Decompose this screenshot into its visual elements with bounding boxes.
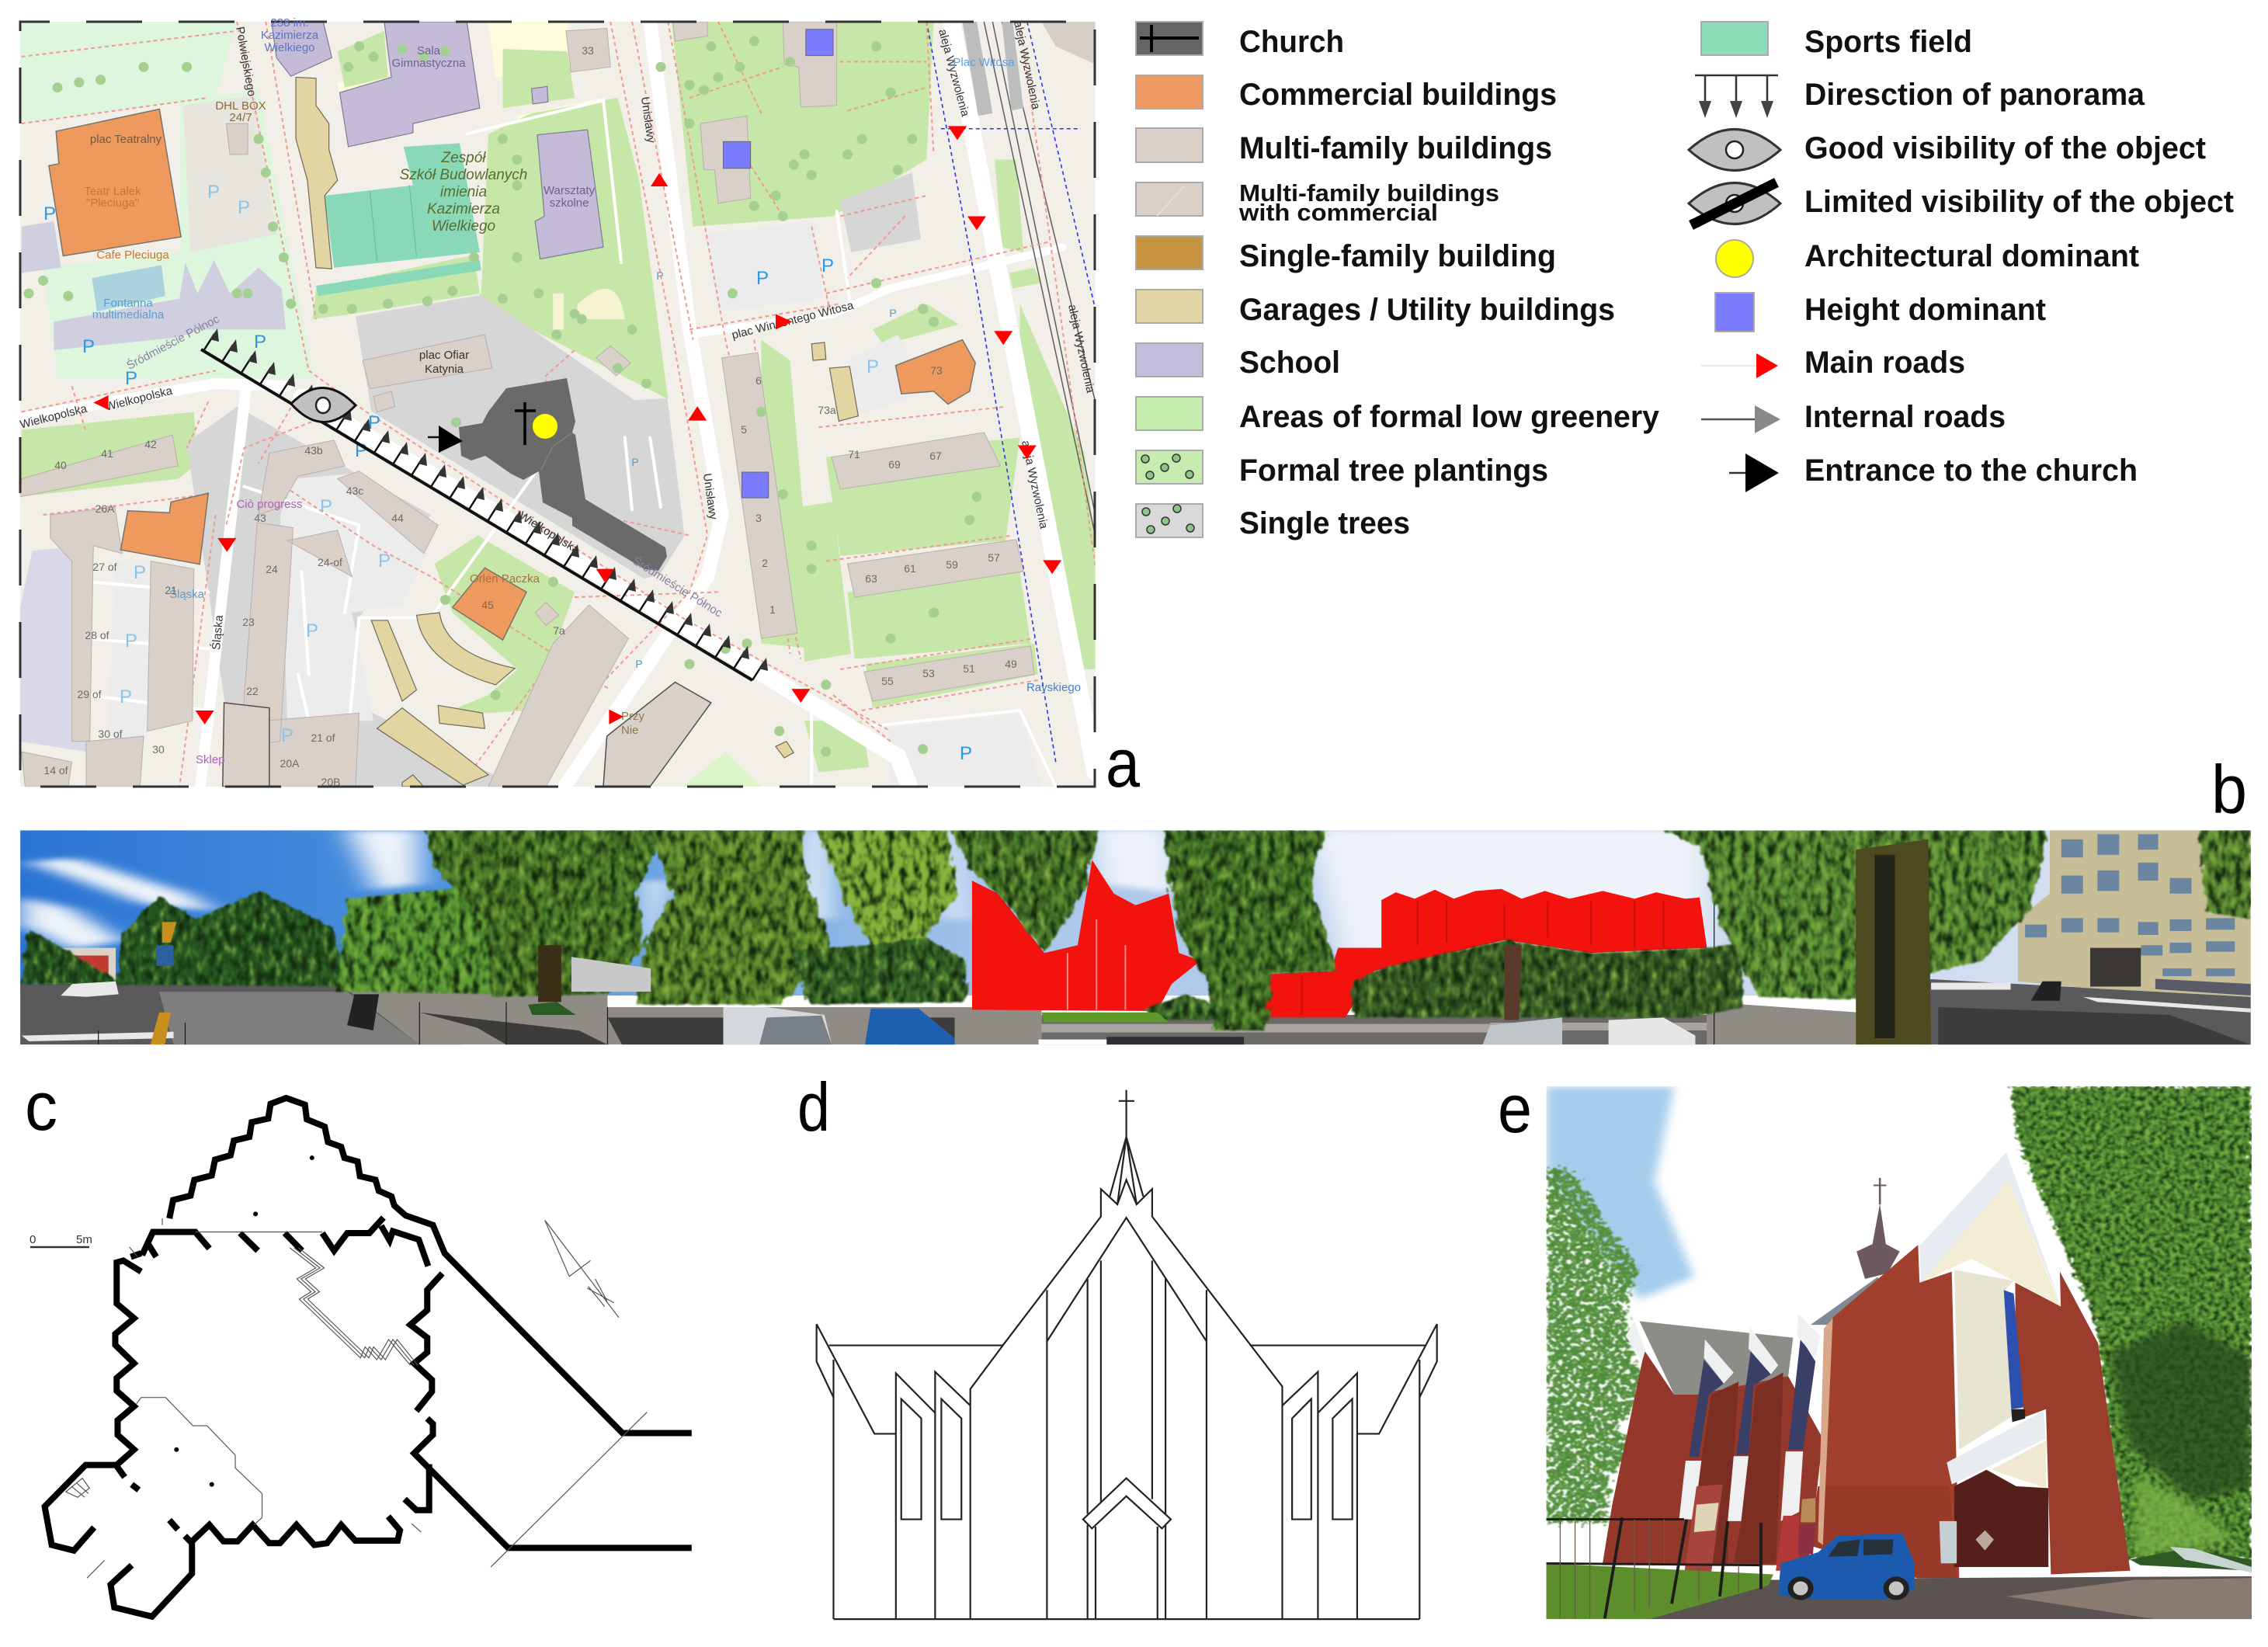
map place labels: 30 of <box>98 728 123 740</box>
map place labels: DHL BOX <box>215 99 266 113</box>
map place labels: P <box>368 412 380 433</box>
map place labels: plac Teatralny <box>90 133 162 146</box>
map place labels: 238 im. <box>270 16 309 30</box>
legend item: commercial buildings: Commercial buildings <box>1239 78 1557 112</box>
map place labels: Fontanna <box>103 297 153 310</box>
map place labels: 49 <box>1005 658 1017 670</box>
icon: church cross on the map <box>515 402 536 445</box>
plan walls <box>45 1098 692 1617</box>
map place labels: 43 <box>254 512 266 524</box>
map place labels: Warsztaty <box>544 184 596 197</box>
map place labels: P <box>134 562 146 583</box>
forecourt and lawn <box>1547 1547 2252 1619</box>
legend item: single-family building <box>1136 236 1556 273</box>
panel label b: b <box>2211 751 2247 828</box>
map place labels: 30 <box>152 743 165 756</box>
map place labels: 5 <box>741 423 747 436</box>
panel label d: d <box>797 1068 830 1145</box>
map place labels: plac Wincentego Witosa <box>731 299 856 342</box>
map place labels: Przy <box>621 710 644 723</box>
map place labels: 20B <box>321 776 340 788</box>
legend item: architectural dominant: Architectural dominant <box>1804 239 2139 273</box>
map place labels: aleja Wyzwolenia <box>1019 440 1051 530</box>
icon: good visibility eye on the map <box>291 387 356 422</box>
map place labels: Polwiejskiego <box>233 26 259 97</box>
panel label e: e <box>1498 1070 1532 1147</box>
map place labels: 61 <box>904 562 916 575</box>
map place labels: 23 <box>242 616 255 628</box>
map place labels: 20A <box>280 757 300 770</box>
map place labels: "Pleciuga" <box>86 196 139 210</box>
map place labels: aleja Wyzwolenia <box>1065 304 1097 394</box>
legend item: good visibility of the object: Good visibility of the object <box>1804 131 2206 165</box>
map place labels: Ciò progress <box>236 498 303 511</box>
panorama church silhouette in red <box>972 860 1707 1017</box>
legend item: multi-family with commercial <box>1136 179 1499 226</box>
legend item: garages and utility buildings: Garages / Utility buildings <box>1239 293 1615 327</box>
legend item: height dominant: Height dominant <box>1804 293 2046 327</box>
legend item: main roads: Main roads <box>1804 346 1965 380</box>
distant building at left <box>43 948 116 984</box>
map place labels: P <box>120 686 132 707</box>
map place labels: 3 <box>755 512 762 524</box>
map place labels: Kazimierza <box>427 201 500 217</box>
map place labels: 21 of <box>311 731 335 744</box>
map place labels: 45 <box>481 599 494 611</box>
legend item: formal tree plantings <box>1136 450 1548 488</box>
map place labels: Wielkiego <box>432 218 495 235</box>
map place labels: 22 <box>246 685 259 697</box>
sky <box>20 830 2251 995</box>
map place labels: 2 <box>762 557 768 569</box>
map place labels: 24-of <box>318 556 342 568</box>
sky <box>1547 1086 2252 1619</box>
map place labels: Cafe Pleciuga <box>96 248 169 262</box>
map place labels: multimedialna <box>92 308 165 321</box>
church building <box>1603 1152 2131 1578</box>
map place labels: 41 <box>101 447 113 460</box>
school buildings <box>272 22 603 259</box>
map place labels: P <box>355 440 367 461</box>
map place labels: 24/7 <box>229 111 252 124</box>
panel c: church floor plan <box>30 1098 692 1617</box>
map place labels: aleja Wyzwolenia <box>936 28 972 119</box>
map place labels: Sklep <box>196 753 225 766</box>
legend item: limited visibility of the object: Limited visibility of the object <box>1804 185 2234 219</box>
map place labels: P <box>281 725 293 746</box>
map place labels: P <box>43 203 56 224</box>
panorama direction line with arrows <box>201 328 768 680</box>
panel a: site map <box>19 16 1140 801</box>
map place labels: P <box>125 631 137 652</box>
map place labels: Teatr Lalek <box>84 185 141 198</box>
map place labels: imienia <box>440 184 487 200</box>
legend item: commercial buildings <box>1136 75 1557 112</box>
legend item: single trees <box>1136 504 1410 540</box>
legend item: sports field <box>1701 22 1972 59</box>
panel label a: a <box>1106 724 1140 801</box>
map place labels: P <box>756 268 769 289</box>
map place labels: 55 <box>881 675 894 687</box>
map place labels: P <box>254 332 266 353</box>
tree and apartment block on the right <box>1663 830 2251 1044</box>
trees <box>29 41 977 752</box>
legend item: multi-family buildings: Multi-family buildings <box>1239 131 1552 165</box>
plan columns <box>176 1158 312 1485</box>
roads <box>20 22 1096 793</box>
map place labels: P <box>82 336 95 357</box>
map place labels: 43c <box>346 485 363 497</box>
map place labels: 14 of <box>43 764 68 777</box>
legend item: multi-family buildings <box>1136 128 1552 165</box>
central trees and shrubs in front of the church <box>950 830 1743 1030</box>
map place labels: 24 <box>266 563 278 575</box>
map place labels: P <box>889 307 897 319</box>
legend item: entrance to the church: Entrance to the church <box>1804 453 2138 488</box>
legend item: single trees: Single trees <box>1239 506 1410 540</box>
map place labels: 53 <box>922 667 935 679</box>
map place labels: P <box>320 496 332 517</box>
parked blue car <box>1778 1534 1915 1600</box>
map place labels: Wielkiego <box>264 41 315 54</box>
map place labels: 6 <box>755 374 762 387</box>
map place labels: 27 of <box>92 561 117 573</box>
map place labels: szkolne <box>550 196 589 210</box>
map base: land use, roads and buildings <box>20 22 1096 793</box>
map place labels <box>19 16 1097 788</box>
map place labels: 42 <box>144 438 157 450</box>
panel label c: c <box>25 1068 57 1145</box>
map place labels: Kazimierza <box>261 29 319 42</box>
map place labels: 28 of <box>85 629 109 641</box>
map place labels: P <box>125 368 137 389</box>
map place labels: 67 <box>929 450 942 462</box>
legend item: limited visibility of the object <box>1689 182 2234 225</box>
right tree <box>2011 1086 2252 1571</box>
map place labels: P <box>867 356 879 377</box>
map place labels: P <box>821 255 834 276</box>
iron fence <box>1547 1517 1761 1618</box>
map place labels: P <box>635 658 643 670</box>
garages and utility buildings <box>296 77 858 787</box>
map place labels: 69 <box>888 458 901 471</box>
legend <box>1136 22 2234 540</box>
map place labels: 29 of <box>77 688 102 700</box>
map place labels: Rayskiego <box>1026 681 1081 694</box>
map place labels: Plac Witosa <box>953 56 1015 69</box>
legend item: height dominant <box>1715 293 2046 332</box>
map place labels: Szkół Budowlanych <box>400 167 527 183</box>
map place labels: Śląska <box>209 614 226 651</box>
legend item: main roads <box>1701 346 1965 380</box>
map place labels: 40 <box>54 459 67 471</box>
map place labels: 7a <box>553 624 565 637</box>
legend item: areas of formal low greenery: Areas of formal low greenery <box>1239 400 1660 434</box>
legend item: multi-family with commercial: Multi-family buildings <box>1239 179 1499 207</box>
map place labels: 59 <box>946 558 958 571</box>
map place labels: Sala <box>417 44 441 57</box>
map place labels: P <box>306 620 318 641</box>
main road direction markers <box>93 126 1061 724</box>
footpath network <box>22 22 1096 787</box>
legend item: single-family building: Single-family building <box>1239 239 1556 273</box>
map place labels: aleja Wyzwolenia <box>1011 20 1043 111</box>
legend item: direction of panorama: Diresction of panorama <box>1804 78 2145 112</box>
road and pavement <box>20 830 2251 1044</box>
map place labels: 73a <box>818 404 836 416</box>
arrow: entrance to the church <box>428 426 463 453</box>
map place labels: P <box>378 551 391 572</box>
scale bar <box>30 1233 92 1247</box>
legend item: school: School <box>1239 346 1340 380</box>
scale bar: 0 <box>30 1233 36 1246</box>
map place labels: Śląska <box>169 587 205 601</box>
map place labels: 21 <box>165 584 177 596</box>
scale bar: 5m <box>76 1233 92 1246</box>
map place labels: Wielkopolska <box>516 509 582 557</box>
map place labels: P <box>207 182 220 203</box>
map place labels: P <box>960 743 972 764</box>
map place labels: 71 <box>848 448 860 460</box>
plan thin lines: balcony, gallery and north arrow <box>66 1218 647 1578</box>
left tree <box>1547 1167 1659 1523</box>
height dominants <box>723 30 833 498</box>
legend item: internal roads: Internal roads <box>1804 400 2006 434</box>
legend item: multi-family with commercial: with commercial <box>1238 199 1438 226</box>
parked cars and cyclist <box>61 922 2061 1044</box>
map place labels: Wielkopolska <box>19 402 89 432</box>
map place labels: P <box>238 197 250 218</box>
legend item: formal tree plantings: Formal tree plantings <box>1239 453 1548 488</box>
map place labels: Nie <box>621 724 639 737</box>
map place labels: plac Ofiar <box>419 349 469 362</box>
legend item: church <box>1136 22 1344 59</box>
map place labels: Śródmieście Północ <box>630 554 725 620</box>
map place labels: Unisławy <box>700 472 720 521</box>
panel d: church elevation drawing <box>817 1090 1437 1619</box>
icon: architectural dominant marker <box>533 414 557 439</box>
map place labels: Zespół <box>440 150 486 166</box>
map place labels: 51 <box>963 662 975 675</box>
map place labels: Katynia <box>425 363 464 376</box>
trees left of the church <box>20 830 966 1015</box>
map place labels: 44 <box>391 512 404 524</box>
legend item: internal roads <box>1701 400 2006 434</box>
map place labels: 26A <box>96 502 115 515</box>
legend item: church: Church <box>1239 25 1344 59</box>
legend item: school <box>1136 343 1340 380</box>
map place labels: Unisławy <box>638 96 658 144</box>
legend item: good visibility of the object <box>1689 129 2206 171</box>
map place labels: 1 <box>769 603 776 616</box>
map place labels: Wielkopolska <box>104 384 174 414</box>
legend item: sports field: Sports field <box>1804 25 1972 59</box>
legend item: direction of panorama <box>1695 75 2145 118</box>
map place labels: 73 <box>930 364 943 377</box>
commercial buildings <box>49 109 975 640</box>
map place labels: Orlen Paczka <box>470 572 540 585</box>
map place labels: 57 <box>988 551 1000 564</box>
map place labels: 43b <box>304 444 323 457</box>
panel e: church photograph <box>1547 1086 2252 1619</box>
map place labels: Śródmieście Północ <box>124 311 222 373</box>
sports fields <box>316 143 481 296</box>
map place labels: 63 <box>865 572 877 585</box>
multi-family buildings <box>20 22 1034 787</box>
church footprint <box>459 378 667 571</box>
panel b: street panorama photo with church highlighted in red <box>20 830 2251 1044</box>
map border <box>20 22 1095 787</box>
map place labels: 33 <box>582 44 594 57</box>
map place labels: P <box>656 269 664 282</box>
map place labels: Gimnastyczna <box>391 57 466 70</box>
map place labels: P <box>631 456 639 468</box>
